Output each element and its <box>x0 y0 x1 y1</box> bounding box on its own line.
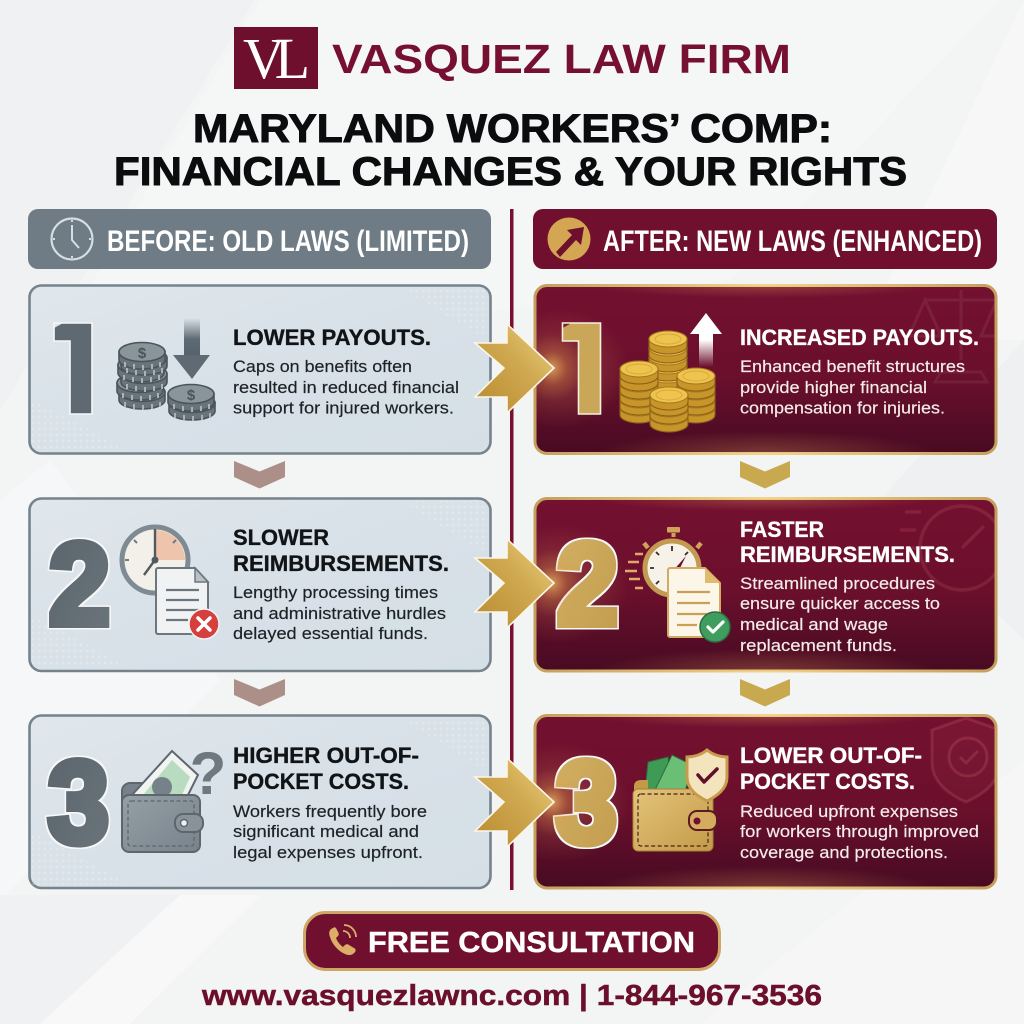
title <box>114 107 907 194</box>
icon: coins and down arrow: $ <box>138 345 147 362</box>
text: increased payouts <box>740 325 979 418</box>
panel: after 2, faster reimbursements <box>534 497 998 672</box>
number 1 <box>562 322 602 415</box>
text: higher out-of-pocket costs: legal expenses upfront. <box>233 843 423 862</box>
call to action button: FREE CONSULTATION <box>368 927 695 959</box>
column header: after <box>533 209 997 269</box>
text: higher out-of-pocket costs: Workers frequently bore <box>233 802 427 821</box>
text: faster reimbursements: FASTER <box>740 517 824 542</box>
logo mark: VL <box>243 26 310 91</box>
text: increased payouts: Enhanced benefit structures <box>740 357 965 376</box>
chevron: after 1 to 2 <box>740 461 790 488</box>
icon: gold coin stacks and up arrow <box>620 313 722 432</box>
text: faster reimbursements: REIMBURSEMENTS. <box>740 542 955 567</box>
icon: rising arrow <box>548 218 590 260</box>
text: slower reimbursements: Lengthy processing times <box>233 583 438 602</box>
panel: before 1, lower payouts <box>30 286 490 454</box>
text: lower out-of-pocket costs: POCKET COSTS. <box>740 769 915 794</box>
number 3: 3 <box>556 737 617 867</box>
text: lower payouts: resulted in reduced financial <box>233 378 459 397</box>
icon: phone <box>329 925 356 955</box>
text: higher out-of-pocket costs: significant medical and <box>233 822 419 841</box>
text: slower reimbursements: delayed essential funds. <box>233 624 428 643</box>
arrow: before to after, row 3 <box>475 758 582 847</box>
icon: clock <box>52 218 92 260</box>
icon: wallet with money and question mark <box>122 740 226 852</box>
chevron: before 2 to 3 <box>234 679 285 706</box>
text: faster reimbursements: ensure quicker access to <box>740 594 940 613</box>
text: higher out-of-pocket costs <box>233 743 427 862</box>
column header: before <box>28 209 491 269</box>
text: lower out-of-pocket costs: for workers through improved <box>740 822 979 841</box>
arrow: before to after, row 2 <box>475 539 582 628</box>
number 1: 1 <box>548 304 626 440</box>
text: higher out-of-pocket costs: HIGHER OUT-OF- <box>233 743 419 768</box>
column header: before: BEFORE: OLD LAWS (LIMITED) <box>107 225 469 258</box>
text: higher out-of-pocket costs: POCKET COSTS. <box>233 769 409 794</box>
text: slower reimbursements <box>233 525 449 643</box>
icon: gold wallet with cash and shield <box>633 750 727 851</box>
text: slower reimbursements: REIMBURSEMENTS. <box>233 551 449 576</box>
text: slower reimbursements: and administrative hurdles <box>233 604 446 623</box>
panel: after 1, increased payouts <box>534 284 998 455</box>
text: faster reimbursements: medical and wage <box>740 615 888 634</box>
text: faster reimbursements <box>740 517 955 655</box>
arrow: before to after, row 1 <box>475 324 582 413</box>
chevron: before 1 to 2 <box>234 461 285 488</box>
text: lower out-of-pocket costs: Reduced upfront expenses <box>740 802 958 821</box>
text: slower reimbursements: SLOWER <box>233 525 329 550</box>
watermark: scales of justice <box>908 290 995 384</box>
text: lower payouts: LOWER PAYOUTS. <box>233 325 431 350</box>
text: lower out-of-pocket costs: LOWER OUT-OF- <box>740 743 922 768</box>
logo wordmark: VASQUEZ LAW FIRM <box>332 36 791 82</box>
call to action button <box>304 912 720 970</box>
centre divider <box>510 209 514 890</box>
text: lower out-of-pocket costs: coverage and protections. <box>740 843 948 862</box>
icon: stopwatch and approved document <box>625 527 730 642</box>
chevron: after 2 to 3 <box>740 679 790 706</box>
text: lower payouts: support for injured workers. <box>233 398 454 418</box>
contact line: www.vasquezlawnc.com | 1-844-967-3536 <box>201 980 822 1012</box>
text: faster reimbursements: replacement funds. <box>740 636 897 655</box>
number 2: 2 <box>49 519 110 649</box>
icon: wallet with money and question mark: ? <box>190 740 226 807</box>
watermark: shield <box>932 718 1000 802</box>
number 2: 2 <box>557 519 618 649</box>
logo: Vasquez Law Firm <box>234 26 791 91</box>
panel: before 2, slower reimbursements <box>30 498 490 671</box>
title: MARYLAND WORKERS’ COMP: <box>193 107 832 151</box>
icon: coins and down arrow <box>117 318 215 421</box>
panel: after 3, lower out-of-pocket costs <box>534 714 998 890</box>
text: lower payouts <box>233 325 459 418</box>
icon: clock and rejected document <box>122 527 219 639</box>
text: faster reimbursements: Streamlined procedures <box>740 574 935 593</box>
number 3: 3 <box>48 737 109 867</box>
text: increased payouts: provide higher financial <box>740 378 927 397</box>
text: increased payouts: compensation for injuries. <box>740 398 945 418</box>
number 1: 1 <box>40 304 118 440</box>
number 1 <box>53 322 93 415</box>
text: lower out-of-pocket costs <box>740 743 979 862</box>
text: lower payouts: Caps on benefits often <box>233 357 412 376</box>
panel: before 3, higher out-of-pocket costs <box>30 716 490 888</box>
icon: coins and down arrow: $ <box>187 387 196 404</box>
watermark: gauge <box>900 506 1004 590</box>
title: FINANCIAL CHANGES & YOUR RIGHTS <box>114 150 907 194</box>
text: increased payouts: INCREASED PAYOUTS. <box>740 325 979 350</box>
